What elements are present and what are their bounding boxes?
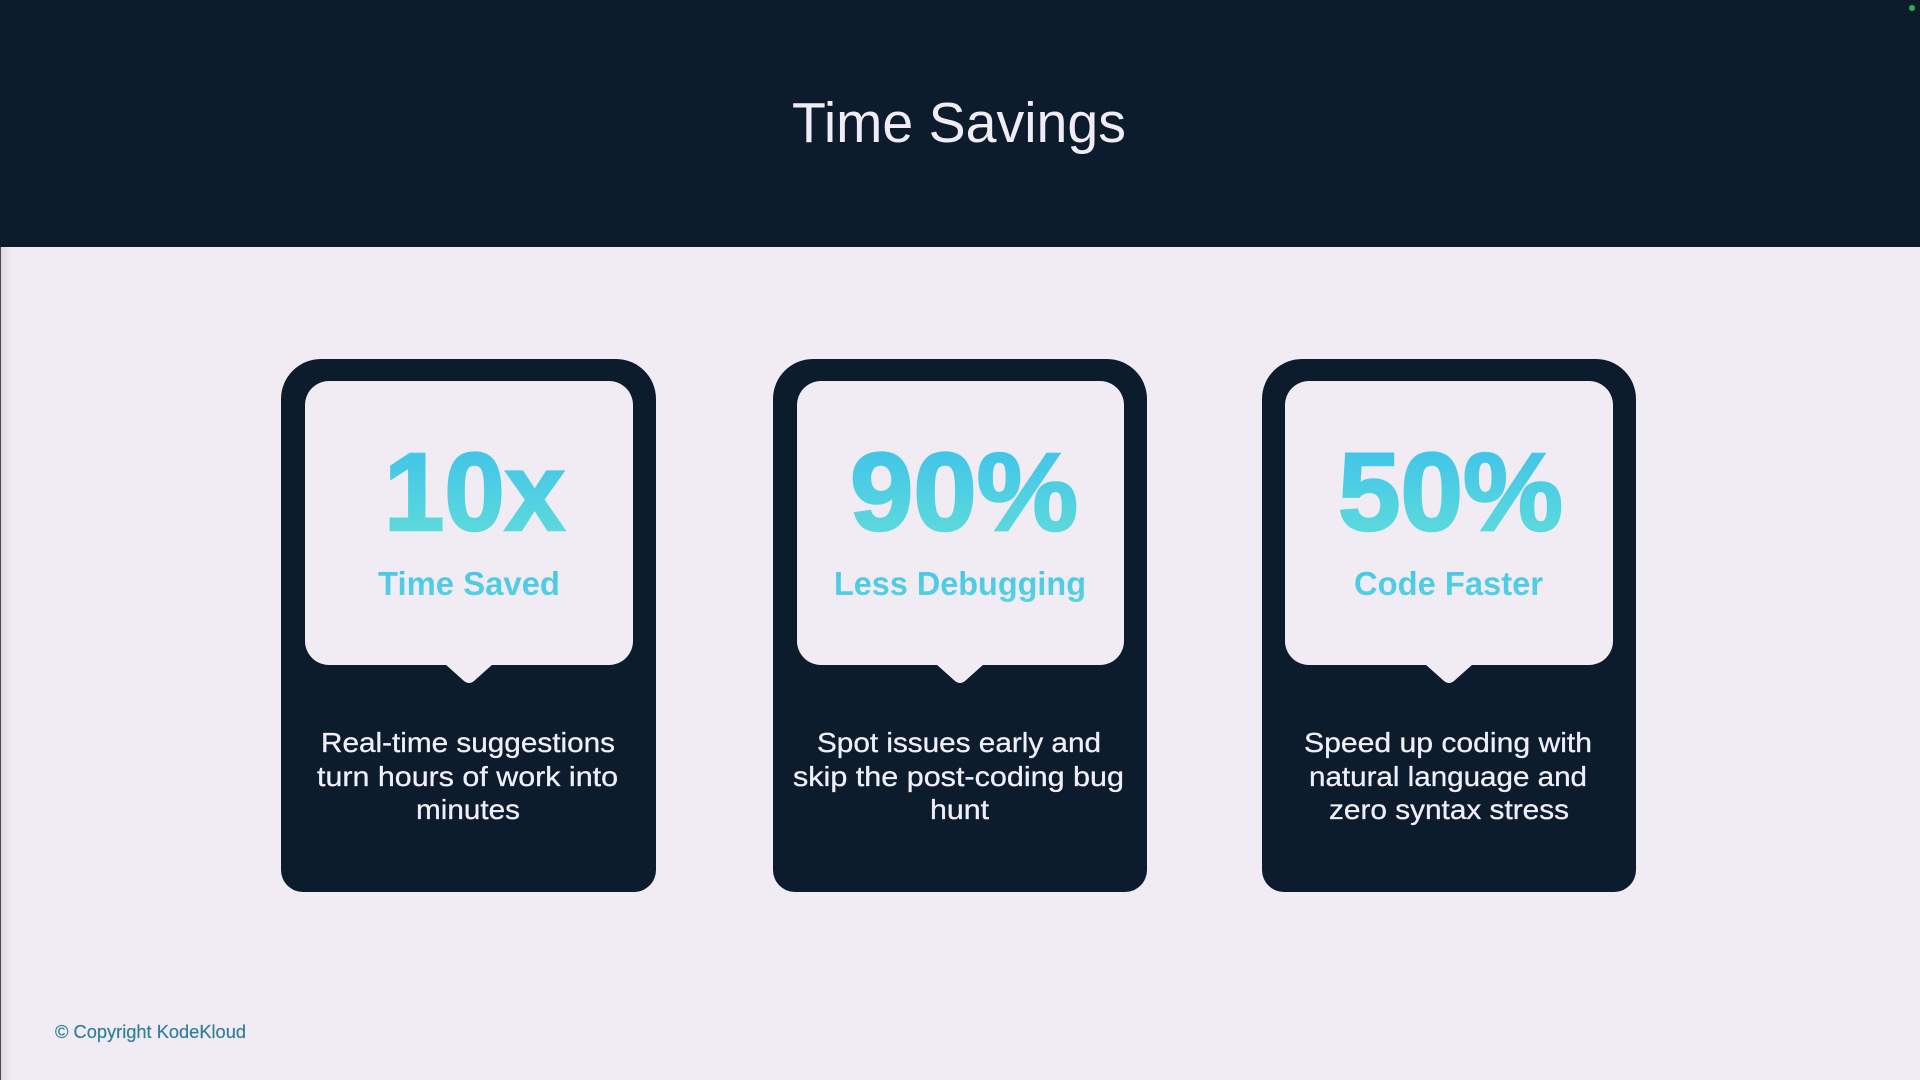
description: skip the post-coding bug [793, 761, 1124, 792]
description: Real-time suggestions [321, 727, 615, 758]
speech bubble [1285, 381, 1613, 683]
stat: 10x: 10x [384, 431, 565, 554]
stat: 50%: 50% [1338, 431, 1563, 554]
speech bubble [797, 381, 1124, 683]
description: Spot issues early and [817, 727, 1101, 758]
label: code faster: Code Faster [1354, 565, 1543, 602]
label: time saved: Time Saved [378, 565, 560, 602]
panel: code faster [1262, 359, 1636, 892]
footer copyright: © Copyright KodeKloud [55, 1021, 246, 1042]
title: Time Savings [792, 91, 1126, 155]
label: less debugging: Less Debugging [834, 565, 1086, 602]
description [1304, 727, 1592, 825]
panel: time saved [281, 359, 656, 892]
panel: less debugging [773, 359, 1147, 892]
description: natural language and [1309, 761, 1587, 792]
stat: 90%: 90% [850, 431, 1078, 554]
description: turn hours of work into [317, 761, 618, 792]
description [317, 727, 618, 825]
description: minutes [416, 794, 520, 825]
description: zero syntax stress [1329, 794, 1569, 825]
speech bubble [305, 381, 633, 683]
description [793, 727, 1124, 825]
header band [0, 0, 1920, 247]
description: Speed up coding with [1304, 727, 1592, 758]
description: hunt [930, 794, 989, 825]
status dot [1909, 5, 1915, 11]
